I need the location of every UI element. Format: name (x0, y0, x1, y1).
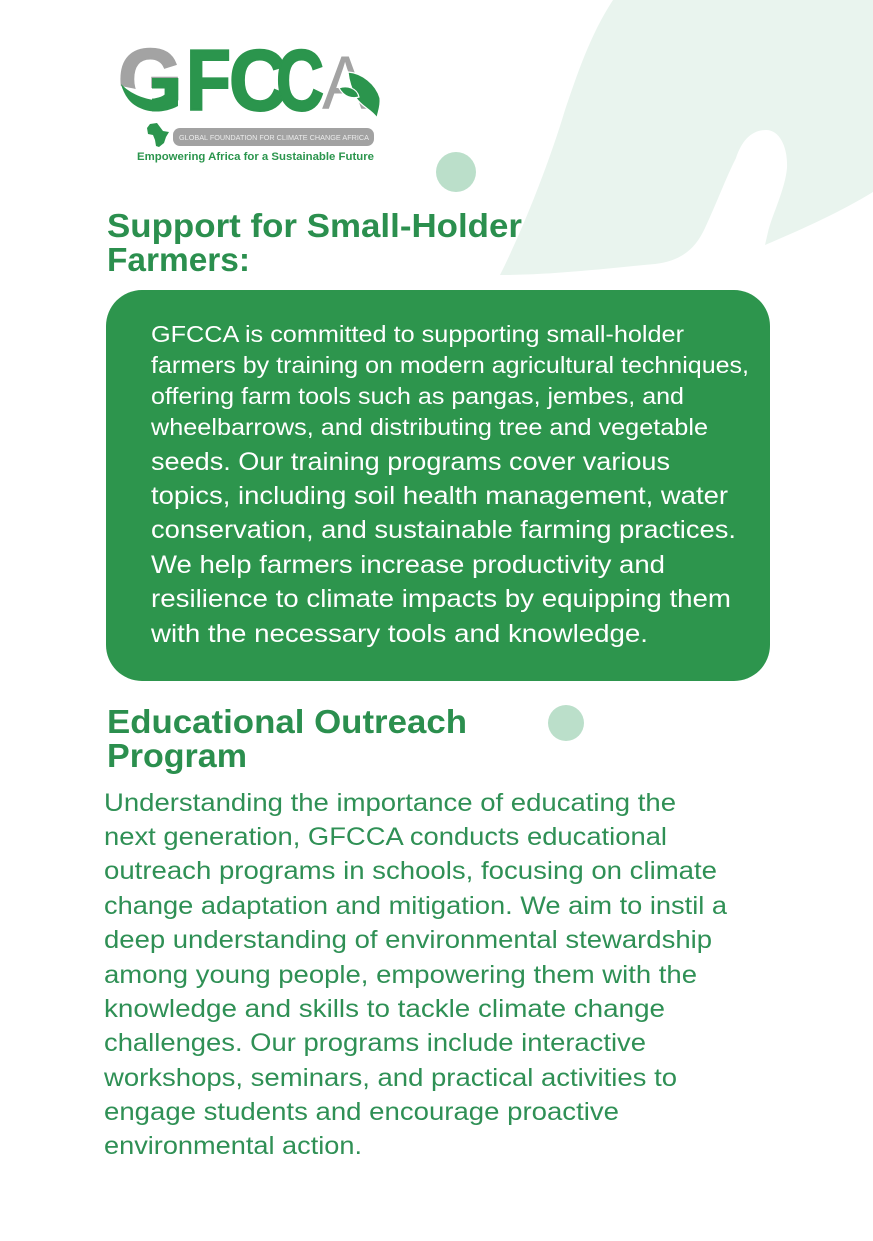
heading: support for small-holder farmers (107, 207, 522, 278)
text block: educational outreach description: environmental action. (104, 1132, 362, 1160)
text block: educational outreach description: workshops, seminars, and practical activities to (103, 1064, 677, 1092)
card paragraph: farmers by training on modern agricultural techniques, (151, 352, 749, 378)
card paragraph: with the necessary tools and knowledge. (150, 620, 648, 648)
card paragraph: conservation, and sustainable farming practices. (151, 516, 736, 544)
card paragraph: resilience to climate impacts by equipping them (151, 585, 731, 613)
text block: educational outreach description: Understanding the importance of educating the (104, 789, 676, 817)
heading: support for small-holder farmers: Support for Small-Holder (107, 207, 522, 244)
logo wordmark: G (118, 32, 182, 128)
text block: educational outreach description: among young people, empowering them with the (104, 961, 697, 989)
text block: educational outreach description: knowledge and skills to tackle climate change (104, 995, 665, 1023)
logo wordmark: A (322, 41, 368, 126)
logo (120, 48, 380, 162)
text block: educational outreach description: deep understanding of environmental stewardship (104, 926, 712, 954)
logo wordmark (120, 48, 366, 112)
icon: map of Africa (147, 123, 169, 147)
text block: educational outreach description: change adaptation and mitigation. We aim to instil a (104, 892, 727, 920)
text block: educational outreach description: outreach programs in schools, focusing on climate (104, 857, 717, 885)
text block: educational outreach description: challenges. Our programs include interactive (104, 1029, 646, 1057)
card paragraph: seeds. Our training programs cover various (151, 448, 670, 476)
card paragraph: wheelbarrows, and distributing tree and vegetable (150, 414, 708, 440)
logo name pill: GLOBAL FOUNDATION FOR CLIMATE CHANGE AFRICA (179, 133, 369, 142)
text block: educational outreach description: next generation, GFCCA conducts educational (104, 823, 667, 851)
text block: educational outreach description (103, 789, 727, 1160)
heading: support for small-holder farmers: Farmers: (107, 241, 250, 278)
logo tagline: Empowering Africa for a Sustainable Future (137, 151, 374, 163)
card paragraph (150, 321, 749, 648)
icon: leaves (339, 72, 380, 118)
heading: educational outreach program: Program (107, 737, 247, 774)
logo wordmark: G (118, 32, 182, 128)
card paragraph: offering farm tools such as pangas, jembes, and (151, 383, 684, 409)
heading: educational outreach program (107, 703, 467, 774)
decorative circle middle (548, 705, 584, 741)
heading: educational outreach program: Educational Outreach (107, 703, 467, 740)
panel: green text card (106, 290, 770, 681)
logo wordmark: C (276, 33, 324, 129)
logo wordmark: C (229, 33, 287, 129)
card paragraph: topics, including soil health management, water (151, 482, 728, 510)
text block: educational outreach description: engage students and encourage proactive (104, 1098, 619, 1126)
card paragraph: GFCCA is committed to supporting small-holder (151, 321, 684, 347)
decorative circle top (436, 152, 476, 192)
logo wordmark: F (186, 33, 231, 129)
card paragraph: We help farmers increase productivity and (151, 551, 665, 579)
background leaf shape (500, 0, 873, 275)
logo name pill (173, 128, 374, 146)
